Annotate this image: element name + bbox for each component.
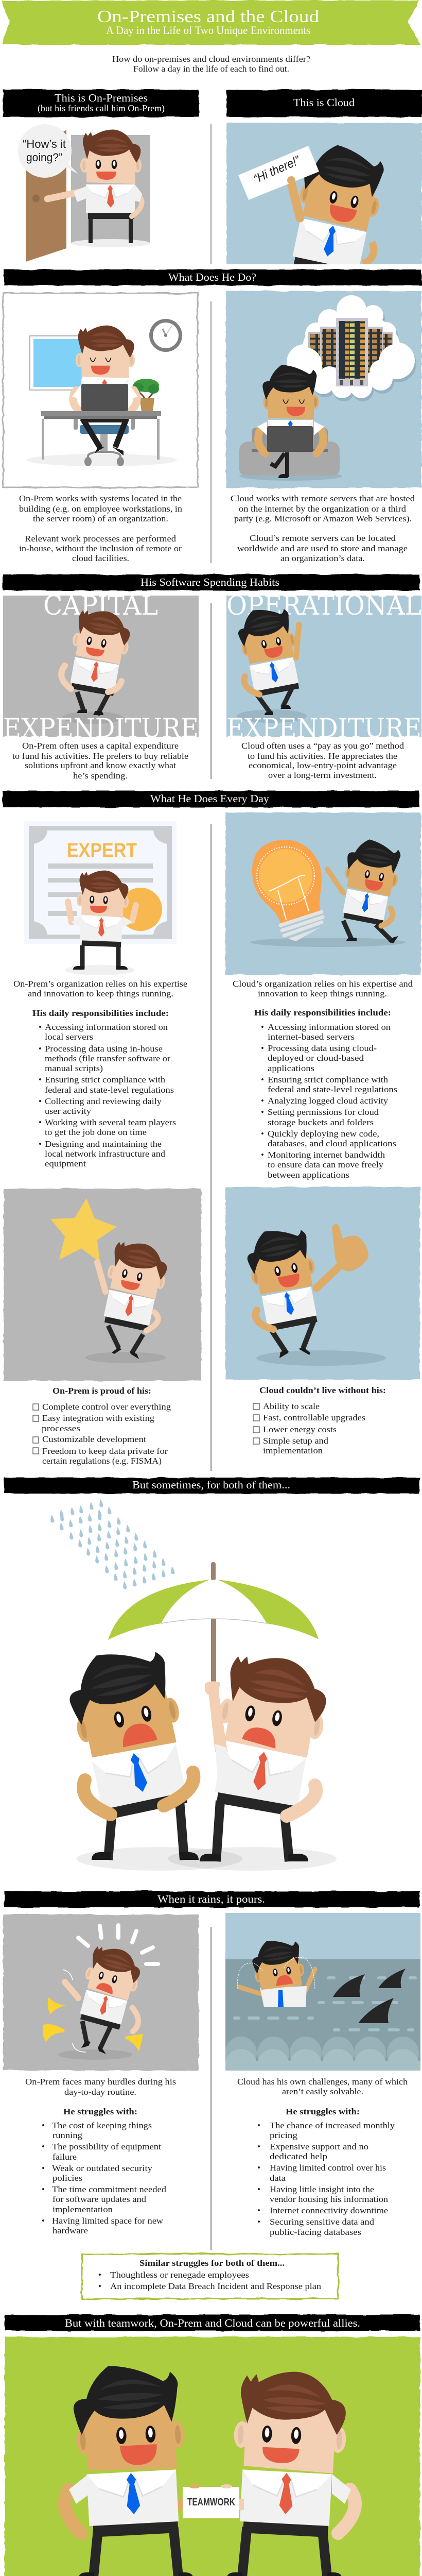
list: on-prem responsibilities: Ensuring strict compliance with (45, 1075, 166, 1084)
illustration: cloud with sign: “Hi there!” (251, 153, 303, 186)
text: cloud challenges: pricing (270, 2130, 298, 2140)
checklist: on-prem proud: Freedom to keep data private for (42, 1446, 168, 1456)
checklist: on-prem proud: processes (42, 1423, 80, 1433)
list: cloud responsibilities: federal and state-level regulations (268, 1084, 397, 1094)
title banner: A Day in the Life of Two Unique Environments (106, 24, 310, 37)
text: on-prem hurdles: day-to-day routine. (64, 2087, 136, 2097)
heading: this is on-premises: This is On-Premises (55, 92, 148, 104)
list: cloud responsibilities: Processing data using cloud- (268, 1043, 377, 1053)
text: on-prem hurdles: policies (52, 2173, 82, 2183)
list: cloud responsibilities: internet-based servers (268, 1032, 355, 1042)
text: cloud challenges: Securing sensitive data and (270, 2217, 375, 2227)
heading: this is cloud (226, 90, 422, 117)
text: on-prem hurdles: On-Prem faces many hurdles during his (25, 2077, 176, 2087)
text: on-prem hurdles: He struggles with: (63, 2107, 137, 2116)
text: cloud challenges: Having little insight into the (270, 2184, 374, 2194)
callout: similar struggles: • (98, 2281, 101, 2291)
bar: but sometimes (4, 1478, 419, 1494)
checklist: cloud can't live without: Fast, controllable upgrades (263, 1413, 365, 1422)
text: on-prem hurdles: • (42, 2142, 45, 2151)
panel: sharks (225, 1913, 420, 2081)
center dividers (210, 124, 212, 2250)
text: expertise left (13, 979, 187, 998)
list: cloud responsibilities: • (261, 1043, 264, 1053)
text: on-prem hurdles: • (42, 2163, 45, 2173)
speech bubble: going?” (26, 151, 62, 164)
illustration: expert certificate (24, 821, 177, 975)
text: on-prem spending: On-Prem often uses a capital expenditure (22, 741, 179, 751)
checklist: cloud can't live without: Lower energy costs (263, 1425, 337, 1434)
bar: software spending: His Software Spending Habits (140, 576, 279, 588)
list: on-prem responsibilities: Processing data using in-house (45, 1044, 163, 1054)
text: cloud challenges: Expensive support and no (270, 2142, 368, 2151)
checklist: on-prem proud: certain regulations (e.g. FISMA) (42, 1456, 162, 1466)
text: cloud description: on the internet by the organization or a third (239, 504, 407, 514)
bar: when it rains (4, 1891, 419, 1907)
list: on-prem responsibilities: • (39, 1075, 42, 1084)
text: cloud challenges: dedicated help (270, 2151, 327, 2161)
list: on-prem responsibilities: • (39, 1117, 42, 1127)
bar: but sometimes: But sometimes, for both of them... (132, 1479, 290, 1491)
panel: capital expenditure (3, 591, 199, 744)
text: on-prem description: building (e.g. on employee workstations, in (19, 504, 183, 514)
illustration: cloud with sign (226, 123, 422, 279)
checklist: on-prem proud: On-Prem is proud of his: (52, 1386, 151, 1396)
list: cloud responsibilities (254, 1008, 397, 1180)
title banner (2, 1, 421, 45)
teamwork sign (178, 2484, 244, 2518)
text: on-prem hurdles: • (42, 2184, 45, 2194)
text: cloud challenges: aren’t easily solvable. (282, 2087, 363, 2096)
panel: on-prem at desk (3, 293, 198, 487)
list: cloud responsibilities: Quickly deploying new code, (268, 1129, 379, 1139)
text: cloud spending (241, 741, 405, 780)
checklist: cloud can't live without: Cloud couldn’t live without his: (259, 1385, 386, 1395)
text: cloud challenges: He struggles with: (286, 2107, 360, 2116)
list: on-prem responsibilities: • (39, 1139, 42, 1149)
list: on-prem responsibilities: Accessing information stored on (45, 1022, 168, 1032)
text: on-prem description: On-Prem works with systems located in the (19, 494, 182, 503)
text: cloud challenges: data (270, 2173, 286, 2183)
text: on-prem hurdles: hardware (52, 2226, 88, 2235)
bar: teamwork (5, 2315, 420, 2331)
panel: on-prem with star (4, 1189, 201, 1381)
teamwork sign: TEAMWORK (187, 2497, 235, 2508)
checklist: cloud can't live without: Simple setup and (263, 1436, 329, 1446)
text: cloud challenges: • (257, 2206, 260, 2215)
text: cloud spending: over a long-term investment. (268, 770, 377, 780)
text: on-prem description: the server room) of an organization. (33, 514, 168, 523)
list: on-prem responsibilities: Collecting and reviewing daily (45, 1096, 162, 1106)
list: cloud responsibilities: storage buckets and folders (268, 1117, 374, 1127)
callout: similar struggles: An incomplete Data Breach Incident and Response plan (110, 2281, 322, 2291)
text: cloud challenges: public-facing databases (270, 2227, 361, 2237)
list: on-prem responsibilities: • (39, 1096, 42, 1106)
text: cloud challenges (237, 2077, 408, 2237)
text: cloud challenges: Cloud has his own challenges, many of which (237, 2077, 408, 2087)
illustration: expert certificate: EXPERT (67, 840, 137, 861)
title banner: On-Premises and the Cloud (97, 7, 319, 26)
bar: software spending (3, 574, 419, 590)
speech bubble: “How’s it (23, 138, 66, 150)
text: cloud description: Cloud works with remote servers that are hosted (231, 494, 415, 503)
checklist: cloud can't live without: implementation (263, 1446, 323, 1455)
bar: what does he do (4, 269, 421, 285)
text: on-prem hurdles: The cost of keeping things (52, 2121, 152, 2130)
text: cloud description (231, 494, 415, 563)
cloud partner (65, 2362, 194, 2576)
list: on-prem responsibilities (32, 1008, 176, 1168)
list: cloud responsibilities: Analyzing logged cloud activity (268, 1096, 389, 1106)
text: on-prem hurdles: • (42, 2216, 45, 2226)
panel: teamwork seesaw (5, 2337, 420, 2576)
list: cloud responsibilities: databases, and cloud applications (268, 1139, 396, 1148)
list: cloud responsibilities: • (261, 1075, 264, 1084)
list: on-prem responsibilities: Working with several team players (45, 1117, 176, 1127)
checklist: on-prem proud: Easy integration with existing (42, 1413, 155, 1423)
list: cloud responsibilities: • (261, 1096, 264, 1106)
text: cloud challenges: • (257, 2163, 260, 2173)
text: on-prem hurdles: The possibility of equipment (52, 2142, 161, 2151)
panel: capital expenditure: EXPENDITURE (3, 714, 199, 744)
heading: this is on-premises (3, 90, 199, 117)
text: on-prem spending (12, 741, 188, 781)
list: cloud responsibilities: between applications (268, 1170, 349, 1180)
text: cloud description: party (e.g. Microsoft or Amazon Web Services). (234, 514, 412, 523)
text: expertise right: Cloud’s organization relies on his expertise and (233, 979, 413, 989)
text: expertise left: and innovation to keep things running. (28, 989, 173, 998)
list: on-prem responsibilities: equipment (45, 1159, 86, 1168)
list: cloud responsibilities: His daily responsibilities include: (254, 1008, 391, 1018)
text: on-prem spending: he’s spending. (73, 771, 128, 781)
speech bubble (18, 124, 78, 178)
list: cloud responsibilities: • (261, 1107, 264, 1117)
text: cloud challenges: Internet connectivity downtime (270, 2206, 388, 2215)
rain drops (50, 1499, 174, 1589)
cloud character (62, 1641, 199, 1860)
list: cloud responsibilities: deployed or cloud-based (268, 1053, 364, 1063)
text: on-prem description (19, 494, 183, 563)
text: on-prem hurdles: running (52, 2130, 83, 2140)
list: on-prem responsibilities: • (39, 1044, 42, 1054)
on-prem partner (226, 2369, 355, 2576)
list: cloud responsibilities: • (261, 1129, 264, 1139)
bar: every day: What He Does Every Day (150, 792, 270, 805)
list: cloud responsibilities: applications (268, 1063, 314, 1073)
list: on-prem responsibilities: His daily responsibilities include: (32, 1008, 169, 1018)
list: on-prem responsibilities: to get the job done on time (45, 1127, 147, 1137)
checklist: cloud can't live without: Ability to scale (263, 1401, 320, 1411)
text: cloud challenges: Having limited control over his (270, 2163, 386, 2173)
text: on-prem description: in-house, without the inclusion of remote or (19, 544, 182, 553)
list: cloud responsibilities: Setting permissions for cloud (268, 1107, 379, 1117)
text: cloud challenges: • (257, 2217, 260, 2227)
illustration: on-prem opening door (18, 124, 150, 262)
bar: when it rains: When it rains, it pours. (157, 1893, 265, 1905)
checklist: cloud can't live without (253, 1385, 386, 1455)
checklist: on-prem proud: Customizable development (42, 1434, 146, 1444)
list: cloud responsibilities: Accessing information stored on (268, 1022, 391, 1032)
heading: this is cloud: This is Cloud (293, 96, 355, 109)
illustration: cloud with light bulb (225, 812, 421, 975)
panel: banana peels (3, 1914, 199, 2071)
illustration: two men under umbrella (62, 1562, 337, 1871)
text: expertise right: innovation to keep things running. (258, 989, 387, 998)
callout: similar struggles: Thoughtless or renegade employees (110, 2270, 249, 2280)
list: on-prem responsibilities: federal and state-level regulations (45, 1085, 174, 1095)
text: cloud spending: to fund his activities. He appreciates the (248, 751, 397, 761)
callout: similar struggles: Similar struggles for both of them... (139, 2258, 285, 2268)
text: cloud challenges: The chance of increased monthly (270, 2121, 395, 2130)
list: cloud responsibilities: • (261, 1150, 264, 1160)
text: cloud challenges: • (257, 2184, 260, 2194)
callout: similar struggles (82, 2254, 338, 2299)
text: on-prem spending: to fund his activities. He prefers to buy reliable (12, 751, 188, 761)
on-prem character (200, 1649, 333, 1861)
text: cloud spending: Cloud often uses a “pay as you go” method (241, 741, 405, 751)
list: on-prem responsibilities: methods (file transfer software or (45, 1054, 170, 1063)
text: on-prem description: Relevant work processes are performed (25, 534, 177, 544)
text: on-prem hurdles: The time commitment needed (52, 2184, 167, 2194)
panel: cloud on couch (226, 291, 421, 488)
list: on-prem responsibilities: local network infrastructure and (45, 1149, 166, 1159)
text: on-prem hurdles: Weak or outdated security (52, 2163, 153, 2173)
text: cloud challenges: • (257, 2121, 260, 2130)
bar: every day (3, 791, 419, 807)
list: cloud responsibilities: Monitoring internet bandwidth (268, 1150, 385, 1160)
text: cloud description: an organization’s data. (280, 553, 365, 563)
text: cloud challenges: vendor housing his information (270, 2194, 389, 2204)
list: on-prem responsibilities: Designing and maintaining the (45, 1139, 162, 1149)
text: expertise left: On-Prem’s organization relies on his expertise (13, 979, 187, 989)
text: on-prem spending: solutions upfront and know exactly what (25, 760, 176, 770)
intro text: Follow a day in the life of each to find out. (133, 64, 289, 74)
list: cloud responsibilities: • (261, 1022, 264, 1032)
text: on-prem hurdles: • (42, 2121, 45, 2130)
text: on-prem description: cloud facilities. (72, 553, 129, 563)
text: cloud description: Cloud’s remote servers can be located (250, 533, 396, 543)
text: on-prem hurdles: failure (52, 2152, 77, 2162)
checklist: on-prem proud: Complete control over everything (42, 1402, 171, 1412)
list: on-prem responsibilities: user activity (45, 1106, 92, 1116)
list: cloud responsibilities: to ensure data can move freely (268, 1160, 384, 1170)
text: cloud spending: economical, low-entry-point advantage (249, 760, 397, 770)
text: on-prem hurdles: Having limited space for new (52, 2216, 164, 2226)
bar: what does he do: What Does He Do? (168, 271, 256, 283)
list: cloud responsibilities: Ensuring strict compliance with (268, 1075, 389, 1084)
list: on-prem responsibilities: local servers (45, 1032, 93, 1042)
panel: capital expenditure: CAPITAL (43, 591, 158, 621)
intro text (112, 54, 310, 74)
heading: this is on-premises: (but his friends call him On-Prem) (38, 103, 165, 114)
bar: teamwork: But with teamwork, On-Prem and Cloud can be powerful allies. (65, 2317, 360, 2329)
panel: operational expenditure (226, 591, 421, 744)
text: cloud challenges: • (257, 2142, 260, 2151)
list: on-prem responsibilities: manual scripts) (45, 1063, 103, 1073)
text: on-prem hurdles (25, 2077, 176, 2235)
text: cloud description: worldwide and are used to store and manage (237, 544, 408, 553)
text: on-prem hurdles: for software updates and (52, 2194, 147, 2204)
panel: cloud thumbs up (225, 1187, 420, 1380)
text: expertise right (233, 979, 413, 998)
text: on-prem hurdles: implementation (52, 2205, 113, 2214)
intro text: How do on-premises and cloud environments differ? (112, 54, 310, 64)
callout: similar struggles: • (98, 2270, 101, 2280)
list: on-prem responsibilities: • (39, 1022, 42, 1032)
checklist: on-prem proud (33, 1386, 171, 1466)
